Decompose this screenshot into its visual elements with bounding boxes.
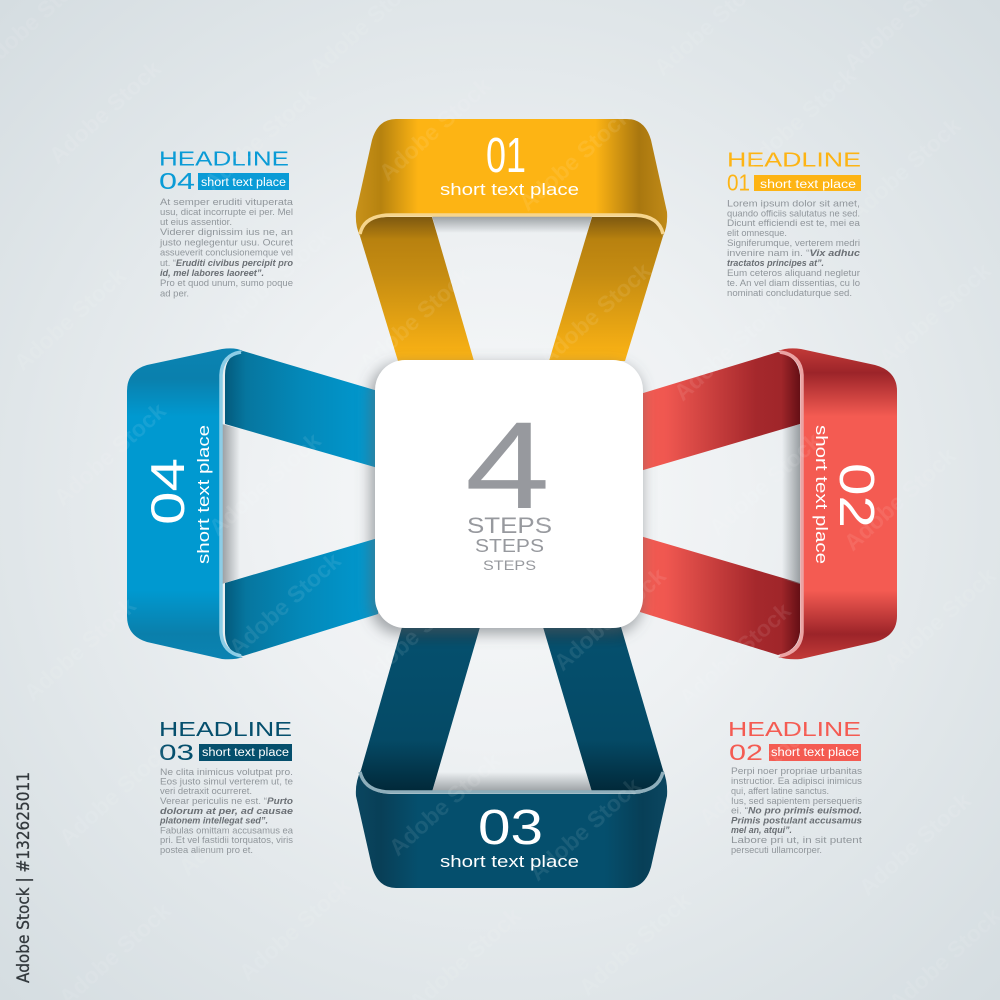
body 01: tractatos principes at”.: [727, 258, 824, 268]
strap right 03: [543, 627, 663, 792]
watermarks: Adobe Stock: [224, 547, 346, 661]
watermarks: Adobe Stock: [174, 767, 296, 881]
watermarks: Adobe Stock: [44, 55, 166, 169]
body 03: Verear periculis ne est. “ Purto: [160, 796, 293, 806]
body 03: Eos justo simul verterem ut, te: [160, 776, 293, 786]
body 04: ut. “Eruditi civibus percipit pro: [160, 258, 293, 268]
body 03: pri. Et vel fastidii torquatos, viris: [160, 835, 293, 845]
strap top 02: [640, 352, 800, 471]
watermarks: Adobe Stock: [354, 262, 476, 376]
body 02: ei. “No pro primis euismod.: [731, 806, 862, 816]
tag 03: short text place: [202, 747, 289, 759]
ribbon edge 03: [360, 772, 663, 792]
watermarks: Adobe Stock: [54, 737, 176, 851]
steps small: STEPS: [483, 557, 536, 573]
ribbon edge 02: [780, 352, 802, 656]
watermarks: Adobe Stock: [739, 62, 861, 176]
card shadow: [370, 364, 642, 634]
body 02: persecuti ullamcorper.: [731, 845, 822, 855]
strap right 01: [549, 217, 663, 361]
body 01: quando officiis salutatus ne sed.: [727, 208, 860, 218]
center card: [370, 360, 643, 634]
body 01: Eum ceteros aliquand negletur: [727, 268, 860, 278]
body 04: [159, 197, 294, 298]
headline 03: HEADLINE: [159, 719, 292, 741]
number 01 small: 01: [727, 170, 750, 196]
body 03: platonem intellegat sed”.: [159, 816, 268, 826]
body 03: veri detraxit ocurreret.: [160, 786, 252, 796]
body 03: Ne clita inimicus volutpat pro.: [160, 767, 293, 777]
label 02: short text place: [812, 425, 831, 564]
ribbon 03: [356, 770, 667, 888]
number 01: 01: [486, 129, 526, 183]
tag 04: short text place: [201, 177, 286, 189]
watermarks: Adobe Stock: [514, 102, 636, 216]
watermarks: Adobe Stock: [704, 427, 826, 541]
body 02: Perpi noer propriae urbanitas: [731, 766, 862, 776]
headline 04: HEADLINE: [159, 148, 289, 170]
body 02: Primis postulant accusamus: [731, 816, 862, 826]
strap top 04: [225, 351, 378, 468]
body 02: [731, 766, 863, 855]
number 03: 03: [478, 801, 543, 855]
label 04: short text place: [194, 425, 213, 564]
watermarks: Adobe Stock: [384, 747, 506, 861]
strap bottom 04: [225, 538, 378, 656]
strap bottom 02: [640, 536, 800, 655]
number 02 small: 02: [729, 740, 763, 765]
body 02: mel an, atqui”.: [731, 825, 792, 835]
body 04: id, mel labores laoreet”.: [160, 268, 264, 278]
headline 01: HEADLINE: [727, 150, 861, 172]
body 01: nominati concludaturque sed.: [727, 288, 852, 298]
panel: band 04: [127, 348, 378, 659]
body 01: [727, 198, 861, 298]
watermarks: Adobe Stock: [354, 577, 476, 691]
body 02: Labore pri ut, in sit putent: [731, 835, 863, 845]
watermarks: Adobe Stock: [524, 772, 646, 886]
watermarks: Adobe Stock: [204, 427, 326, 541]
watermarks: Adobe Stock: [49, 397, 171, 511]
text block 01: [727, 150, 861, 298]
steps medium: STEPS: [475, 536, 544, 556]
ribbon 01: [356, 119, 667, 236]
label 03: short text place: [440, 852, 579, 871]
label 01: short text place: [440, 180, 579, 199]
watermarks: Adobe Stock: [374, 72, 496, 186]
body 03: dolorum at per, ad causae: [160, 806, 293, 816]
watermarks: Adobe Stock: [524, 427, 646, 541]
watermarks: Adobe Stock: [549, 562, 671, 676]
headline 02: HEADLINE: [728, 719, 861, 741]
ribbon 02: [778, 348, 897, 659]
tag 02: short text place: [771, 747, 859, 759]
tag 01: [754, 175, 861, 191]
body 04: usu, dicat incorrupte ei per. Mel: [160, 207, 293, 217]
body 04: ut eius assentior.: [160, 217, 232, 227]
body 02: Ius, sed sapientem persequeris: [731, 796, 862, 806]
body 01: elit omnesque.: [727, 228, 787, 238]
number 02: 02: [829, 463, 883, 528]
watermarks: Adobe Stock: [669, 292, 791, 406]
body 03: postea alienum pro et.: [160, 845, 253, 855]
steps large: STEPS: [467, 513, 552, 538]
watermarks: Adobe Stock: [214, 222, 336, 336]
body 04: Viderer dignissim ius ne, an: [160, 227, 293, 237]
watermarks: Adobe Stock: [199, 82, 321, 196]
watermarks: Adobe Stock: [574, 887, 696, 1000]
number 03 small: 03: [159, 740, 194, 765]
body 01: invenire nam in. “ Vix adhuc: [727, 248, 860, 258]
body 01: Dicunt efficiendi est te, mei ea: [727, 218, 861, 228]
tag 04: [198, 173, 289, 190]
watermarks: Adobe Stock: [534, 257, 656, 371]
watermarks: Adobe Stock: [19, 592, 141, 706]
ribbon 04: [127, 348, 243, 659]
text block 04: [159, 148, 294, 298]
body 04: justo neglegentur usu. Ocuret: [159, 238, 293, 248]
strap left 03: [361, 627, 480, 792]
gap shadow 02: [782, 424, 800, 584]
body 04: Pro et quod unum, sumo poque: [160, 278, 293, 288]
watermarks: Adobe Stock: [874, 257, 996, 371]
ribbon edge 01: [360, 215, 663, 234]
watermarks: Adobe Stock: [839, 442, 961, 556]
watermarks: Adobe Stock: [234, 872, 356, 986]
number 04: 04: [141, 458, 194, 525]
body 04: At semper eruditi vituperata: [160, 197, 294, 207]
watermarks: Adobe Stock: [384, 402, 506, 516]
stock id caption: Adobe Stock | #132625011: [14, 772, 34, 983]
text block 03: [159, 719, 294, 855]
watermarks: Adobe Stock: [844, 112, 966, 226]
body 01: te. An vel diam dissentias, cu lo: [727, 278, 860, 288]
strap left 01: [360, 217, 474, 361]
body 02: instructior. Ea adipisci inimicus: [731, 776, 862, 786]
ribbon edge 04: [221, 352, 241, 656]
body 03: Fabulas omittam accusamus ea: [160, 826, 294, 836]
watermarks: Adobe Stock: [674, 597, 796, 711]
body 02: qui, affert latine sanctus.: [731, 786, 829, 796]
gap shadow 04: [222, 424, 240, 584]
watermarks: Adobe Stock: [854, 787, 976, 901]
watermarks: Adobe Stock: [879, 562, 1000, 676]
watermarks: Adobe Stock: [694, 717, 816, 831]
gap shadow 03: [432, 772, 592, 792]
tag 01: short text place: [760, 179, 856, 191]
watermarks: Adobe Stock: [9, 262, 131, 376]
numeral 4: 4: [465, 397, 550, 535]
panel: band 01: [356, 119, 667, 361]
body 04: ad per.: [160, 288, 189, 298]
panel: band 03: [356, 627, 667, 888]
card: [375, 360, 643, 628]
body 03: [159, 767, 294, 855]
body 04: assueverit conclusionemque vel: [160, 248, 293, 258]
body 01: Lorem ipsum dolor sit amet,: [727, 198, 860, 208]
panel: band 02: [640, 348, 897, 659]
gap shadow 01: [432, 216, 592, 233]
text block 02: [728, 719, 863, 855]
number 04 small: 04: [159, 168, 195, 194]
body 01: Signiferumque, verterem medri: [727, 238, 860, 248]
